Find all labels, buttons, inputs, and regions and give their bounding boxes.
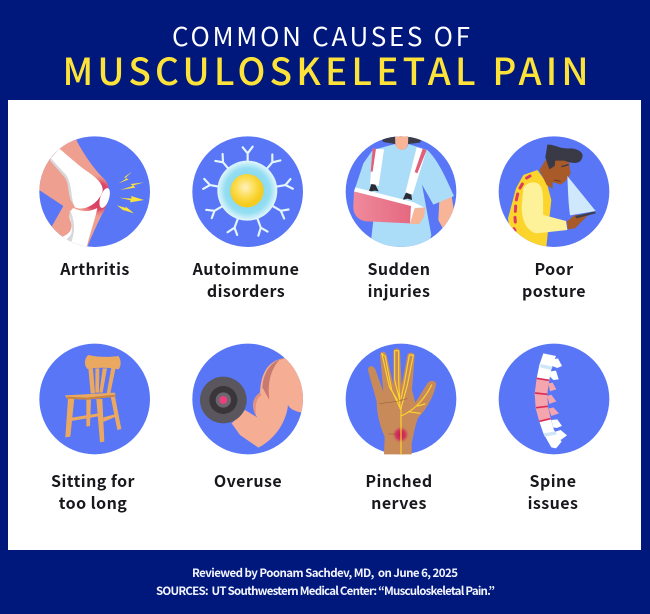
icon: man bent over phone <box>499 136 609 250</box>
label: arthritis: Arthritis <box>59 256 130 280</box>
white upper and lower vertebrae <box>537 353 567 448</box>
white content panel <box>8 100 641 550</box>
panel: sudden injuries <box>346 136 456 302</box>
panel: sitting for too long <box>39 344 150 514</box>
footer credits <box>156 565 495 599</box>
panel: autoimmune disorders <box>192 136 303 302</box>
label: poor posture: Poor <box>534 256 574 280</box>
panel: arthritis <box>37 136 150 280</box>
panel: overuse <box>192 344 305 492</box>
panel: pinched nerves <box>346 344 456 514</box>
label: autoimmune disorders: disorders <box>207 278 285 302</box>
label: sudden injuries: injuries <box>368 278 430 302</box>
panel: spine issues <box>499 344 609 514</box>
footer credits: SOURCES: UT Southwestern Medical Center: “Musculoskeletal Pain.” <box>156 583 495 599</box>
icon: arm in sling <box>346 136 456 250</box>
title <box>62 17 588 96</box>
title: COMMON CAUSES OF <box>172 17 470 54</box>
label: poor posture: posture <box>522 278 586 302</box>
title: MUSCULOSKELETAL PAIN <box>62 42 588 96</box>
label: spine issues: Spine <box>530 468 576 492</box>
label: autoimmune disorders: Autoimmune <box>193 256 299 280</box>
label: overuse: Overuse <box>214 468 282 492</box>
icon: immune cell <box>192 136 303 247</box>
icon: arm lifting dumbbell <box>192 344 305 454</box>
icon: hand with nerve <box>346 344 456 454</box>
footer credits: Reviewed by Poonam Sachdev, MD, on June 6, 2025 <box>192 565 458 581</box>
pink damaged vertebrae <box>535 378 559 422</box>
label: sudden injuries: Sudden <box>367 256 431 280</box>
label: sitting for too long: Sitting for <box>51 468 135 492</box>
icon: wooden chair <box>39 344 150 454</box>
icon: knee joint <box>37 136 150 250</box>
icon: spine <box>499 344 609 454</box>
label: pinched nerves: Pinched <box>365 468 433 492</box>
label: spine issues: issues <box>528 490 578 514</box>
panel: poor posture <box>499 136 609 302</box>
label: sitting for too long: too long <box>59 490 127 514</box>
label: pinched nerves: nerves <box>371 490 427 514</box>
